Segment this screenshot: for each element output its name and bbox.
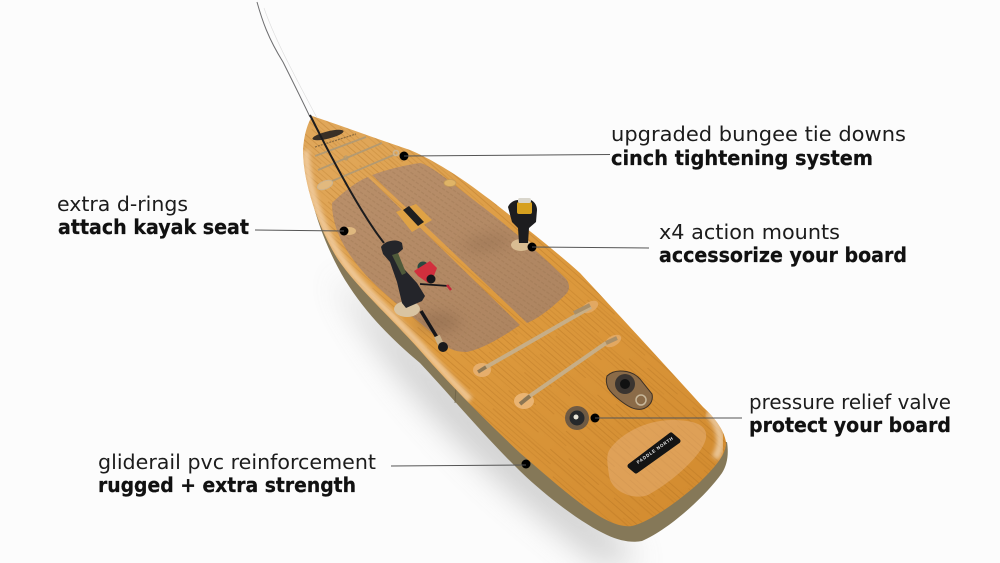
callout: pressure relief valve: protect your board bbox=[749, 413, 951, 437]
callout: action mounts: x4 action mounts bbox=[659, 220, 840, 244]
action mount with can bbox=[508, 198, 537, 243]
wood grain bbox=[303, 116, 726, 526]
pressure relief valve bbox=[565, 406, 589, 430]
mount base left bbox=[394, 301, 420, 317]
pad shadows bbox=[416, 233, 512, 331]
callout: d-rings bbox=[57, 192, 348, 239]
callout: pressure relief valve bbox=[590, 390, 951, 437]
callout: action mounts: accessorize your board bbox=[659, 243, 907, 267]
center handle bbox=[396, 204, 432, 232]
nose bungees bbox=[315, 137, 398, 192]
callout: pressure relief valve: pressure relief valve bbox=[749, 390, 951, 414]
fishing reel bbox=[414, 261, 451, 290]
tail pad bbox=[607, 420, 706, 497]
inflation valve bbox=[606, 371, 652, 409]
carry handle bbox=[630, 435, 678, 471]
d-ring patches bbox=[342, 180, 456, 235]
ground shadow bbox=[335, 275, 640, 563]
callout: bungee tie downs: cinch tightening system bbox=[611, 146, 873, 170]
rail seam bbox=[455, 386, 456, 403]
straps bbox=[473, 298, 623, 409]
olive gliderail bbox=[312, 200, 728, 542]
callout: action mounts bbox=[528, 220, 907, 267]
fishing rod bbox=[257, 2, 448, 352]
mount base right bbox=[511, 239, 531, 251]
carry handle: PADDLE NORTH bbox=[636, 436, 674, 465]
traction pad right bbox=[372, 163, 569, 323]
callout: bungee tie downs: upgraded bungee tie downs bbox=[611, 122, 906, 146]
callout: gliderail bbox=[98, 450, 530, 497]
wood deck bbox=[303, 116, 726, 526]
callout: d-rings: extra d-rings bbox=[57, 192, 188, 216]
traction pad left bbox=[332, 177, 520, 352]
deck edge highlights bbox=[306, 150, 720, 458]
callout: bungee tie downs bbox=[400, 122, 906, 170]
callout: d-rings: attach kayak seat bbox=[58, 215, 249, 239]
callout: gliderail: rugged + extra strength bbox=[98, 473, 356, 497]
nose logo bbox=[312, 128, 356, 147]
rod holder bbox=[381, 240, 425, 308]
callout: gliderail: gliderail pvc reinforcement bbox=[98, 450, 376, 474]
paddle board bbox=[257, 2, 728, 542]
